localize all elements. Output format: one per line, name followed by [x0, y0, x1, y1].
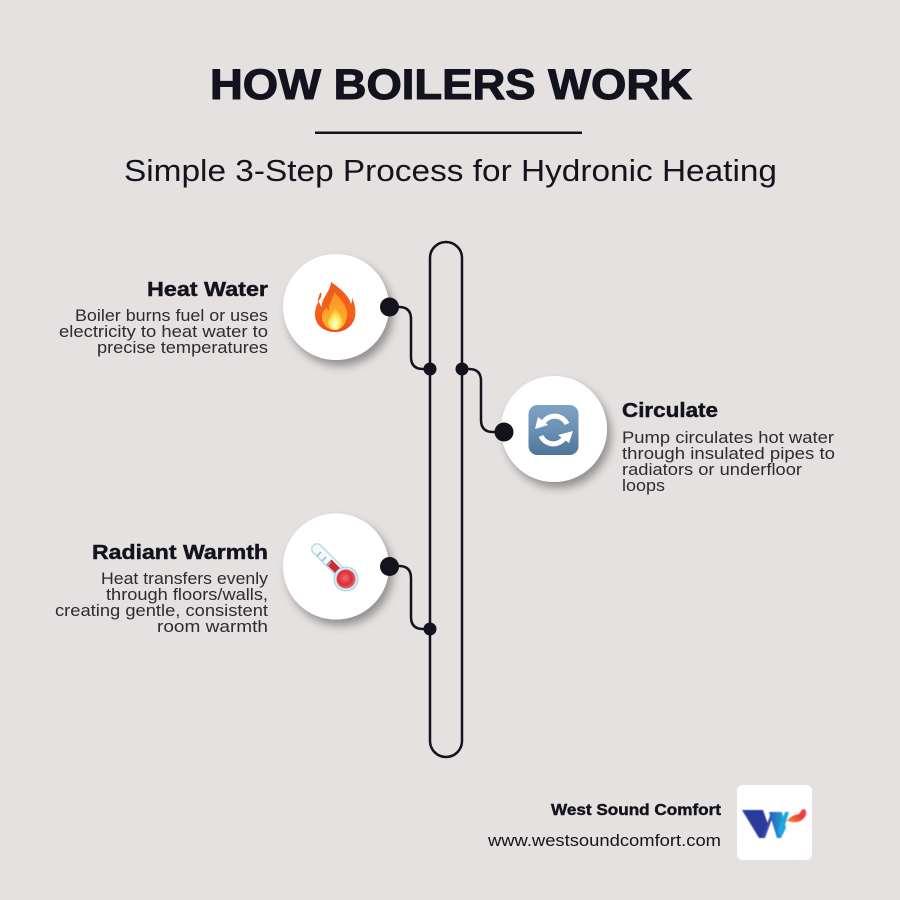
step 1 circle	[283, 254, 389, 360]
icon: cycle arrows	[528, 405, 578, 455]
step 1 description	[59, 307, 268, 357]
step 3: radiant warmth	[55, 514, 399, 636]
title: HOW BOILERS WORK	[210, 61, 692, 109]
step 2 description: loops	[622, 477, 665, 495]
step 1: heat water	[59, 254, 399, 360]
connector: pipe to circulate	[456, 362, 504, 432]
step 3 circle	[283, 514, 389, 620]
step 2 description: through insulated pipes to	[622, 445, 835, 463]
footer brand name: West Sound Comfort	[551, 802, 722, 819]
step 2 description: Pump circulates hot water	[622, 429, 835, 447]
step 2 circle	[501, 376, 607, 482]
step 3 heading: Radiant Warmth	[92, 541, 268, 564]
step 2 description	[622, 429, 835, 495]
step 2 connector dot	[494, 422, 514, 442]
step 1 heading: Heat Water	[147, 278, 268, 301]
step 3 description: Heat transfers evenly	[101, 570, 269, 588]
footer website: www.westsoundcomfort.com	[487, 832, 721, 850]
step 3 description	[55, 570, 269, 636]
step 3 connector dot	[380, 557, 399, 576]
step 1 description: electricity to heat water to	[59, 323, 268, 341]
icon: flame	[315, 282, 355, 332]
connector: heat water to pipe	[389, 307, 436, 376]
step 1 connector dot	[380, 298, 399, 316]
step 2 heading: Circulate	[622, 399, 718, 422]
step 1 description: Boiler burns fuel or uses	[75, 307, 268, 325]
central pipe loop	[430, 242, 462, 757]
title divider	[315, 132, 582, 134]
step 2 description: radiators or underfloor	[622, 461, 803, 479]
step 1 description: precise temperatures	[97, 339, 268, 357]
connector: radiant warmth to pipe	[389, 566, 436, 636]
icon: thermometer	[317, 549, 358, 591]
subtitle: Simple 3-Step Process for Hydronic Heating	[124, 153, 777, 188]
step 3 description: creating gentle, consistent	[55, 602, 268, 620]
logo	[737, 785, 812, 860]
step 3 description: room warmth	[157, 618, 268, 636]
step 2: circulate	[494, 376, 835, 495]
step 3 description: through floors/walls,	[106, 586, 268, 604]
